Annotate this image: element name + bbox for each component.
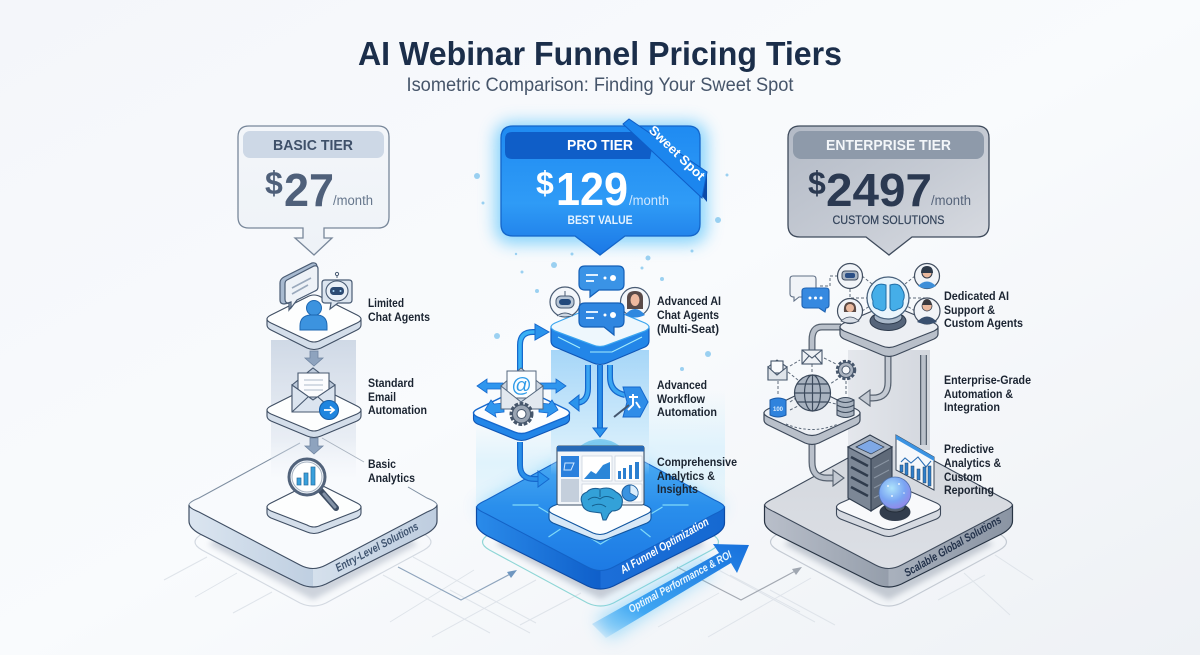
big arrow: optimal performance: Optimal Performance & ROI [627, 549, 735, 616]
icon: lower chat bubble [579, 303, 624, 335]
base label: Scalable Global Solutions [902, 514, 1004, 580]
label: advanced workflow automation: Automation [657, 405, 717, 419]
panel: enterprise tier [764, 126, 1031, 606]
title: AI Webinar Funnel Pricing Tiers [358, 35, 842, 72]
icon: open envelope [768, 360, 787, 380]
label: dedicated support: Dedicated AI [944, 289, 1009, 303]
label: enterprise automation: Automation & [944, 387, 1013, 401]
icon: email at sign [501, 368, 543, 409]
platform: analytics [549, 488, 651, 540]
icon: workflow hexagon [614, 387, 648, 417]
label: predictive analytics: Analytics & [944, 456, 1001, 470]
label: predictive analytics: Reporting [944, 483, 994, 497]
icon: envelope with arrow [292, 368, 338, 420]
icon: robot bubble [322, 272, 352, 309]
icon: chat bubble [280, 263, 318, 310]
enterprise price card: /month [931, 193, 971, 208]
label: predictive analytics [944, 442, 1001, 497]
platform: email [267, 386, 361, 438]
label: advanced workflow automation [657, 378, 717, 419]
enterprise price card: $ [808, 165, 826, 201]
label: comprehensive analytics [657, 455, 737, 496]
basic column [271, 340, 356, 480]
grey flow arrow left [398, 567, 517, 600]
basic price card: /month [333, 193, 373, 208]
label: dedicated support: Support & [944, 303, 995, 317]
flow arrowheads [535, 324, 607, 487]
enterprise price card [788, 126, 989, 255]
icon: blue database: 100 [773, 407, 784, 413]
label: comprehensive analytics: Analytics & [657, 469, 715, 483]
label: dedicated support [944, 289, 1023, 330]
pro price card: BEST VALUE [568, 215, 633, 227]
glow dome [580, 439, 620, 446]
icon: gear [838, 362, 854, 378]
icon: brain crystal [867, 277, 909, 330]
pro price card: $ [536, 165, 554, 201]
label: predictive analytics: Predictive [944, 442, 994, 456]
label: basic analytics: Basic [368, 457, 396, 471]
sweet spot ribbon: Sweet Spot [646, 122, 709, 184]
label: predictive analytics: Custom [944, 470, 982, 484]
grey flow arrow right [677, 567, 802, 600]
platform: email [474, 390, 570, 440]
basic price card: $ [265, 165, 283, 201]
arrow: chat to email [305, 351, 323, 366]
label: standard email automation: Standard [368, 376, 414, 390]
panel: pro tier [474, 119, 749, 640]
label: basic analytics: Analytics [368, 471, 415, 485]
platform: agents [551, 306, 649, 364]
subtitle: Isometric Comparison: Finding Your Sweet Spot [406, 75, 794, 96]
icon: robot avatar [838, 264, 862, 288]
side glow columns [476, 390, 725, 505]
pro base glow [476, 440, 725, 590]
arrow: email to analytics [305, 438, 323, 454]
icon: server rack [848, 435, 892, 511]
platform: analytics [836, 484, 940, 536]
panel: basic tier [189, 126, 437, 606]
enterprise base platform [764, 440, 1012, 606]
platform: agents [840, 306, 938, 356]
icon: upper chat bubble [579, 266, 624, 297]
icon: chart panel [896, 435, 934, 490]
base label: AI Funnel Optimization [618, 516, 711, 577]
icon: person [300, 300, 327, 330]
center column [551, 350, 649, 475]
icon: woman avatar [620, 288, 650, 318]
glow behind card [495, 122, 707, 244]
label: enterprise automation [944, 373, 1031, 414]
icon: woman avatar [838, 298, 862, 324]
dashed agent links [820, 276, 927, 311]
icon: email at sign: @ [511, 375, 532, 397]
basic price card [238, 126, 389, 255]
label: advanced chat agents: Advanced AI [657, 294, 721, 308]
basic price card: 27 [284, 164, 334, 216]
leader line [322, 438, 364, 462]
icon: double arrows [477, 379, 566, 417]
label: standard email automation: Email [368, 390, 396, 404]
icon: blue database [770, 398, 786, 417]
label: advanced chat agents: Chat Agents [657, 308, 719, 322]
label: comprehensive analytics: Insights [657, 482, 698, 496]
label: comprehensive analytics: Comprehensive [657, 455, 737, 469]
icon: gear [512, 404, 532, 424]
icon: magnifier with bars [289, 459, 336, 508]
label: enterprise automation: Enterprise-Grade [944, 373, 1031, 387]
label: advanced workflow automation: Workflow [657, 392, 706, 406]
icon: envelope [802, 350, 822, 364]
pro price card [501, 126, 700, 255]
icon: chat bubbles [790, 276, 829, 312]
label: limited chat agents: Chat Agents [368, 310, 430, 324]
sweet spot ribbon [623, 119, 709, 202]
platform: chat [267, 295, 361, 350]
big arrow: optimal performance [592, 544, 749, 640]
label: standard email automation [368, 376, 427, 417]
label: basic analytics [368, 457, 415, 485]
dashed integration links [778, 358, 846, 410]
icon: robot avatar [550, 287, 580, 317]
basic price card: BASIC TIER [273, 138, 354, 154]
pipe arrowheads [833, 390, 870, 486]
icon: globe [794, 375, 830, 411]
enterprise price card: CUSTOM SOLUTIONS [832, 215, 945, 227]
icon: brain [581, 488, 622, 520]
enterprise price card: ENTERPRISE TIER [826, 138, 952, 154]
label: advanced workflow automation: Advanced [657, 378, 707, 392]
particles [474, 173, 728, 371]
pro base platform [476, 442, 724, 606]
icon: man avatar [914, 298, 940, 324]
icon: headset avatar [914, 264, 940, 288]
label: advanced chat agents [657, 294, 721, 336]
enterprise price card: 2497 [826, 164, 932, 216]
label: limited chat agents [368, 296, 430, 324]
flow pipes [520, 332, 625, 479]
pro price card: /month [629, 193, 669, 208]
platform: integration [764, 390, 860, 444]
icon: analytics dashboard [557, 446, 644, 505]
center column [848, 350, 930, 450]
label: limited chat agents: Limited [368, 296, 404, 310]
label: advanced chat agents: (Multi-Seat) [657, 322, 719, 336]
pro price card: PRO TIER [567, 138, 634, 154]
label: standard email automation: Automation [368, 403, 427, 417]
platform: analytics [267, 483, 361, 534]
base label: Entry-Level Solutions [334, 521, 421, 575]
label: dedicated support: Custom Agents [944, 316, 1023, 330]
label: enterprise automation: Integration [944, 400, 1000, 414]
pro price card: 129 [556, 163, 628, 215]
connecting pipes [812, 327, 924, 478]
icon: grey database [837, 398, 854, 418]
icon: crystal ball [879, 477, 911, 521]
basic base platform [189, 440, 437, 606]
